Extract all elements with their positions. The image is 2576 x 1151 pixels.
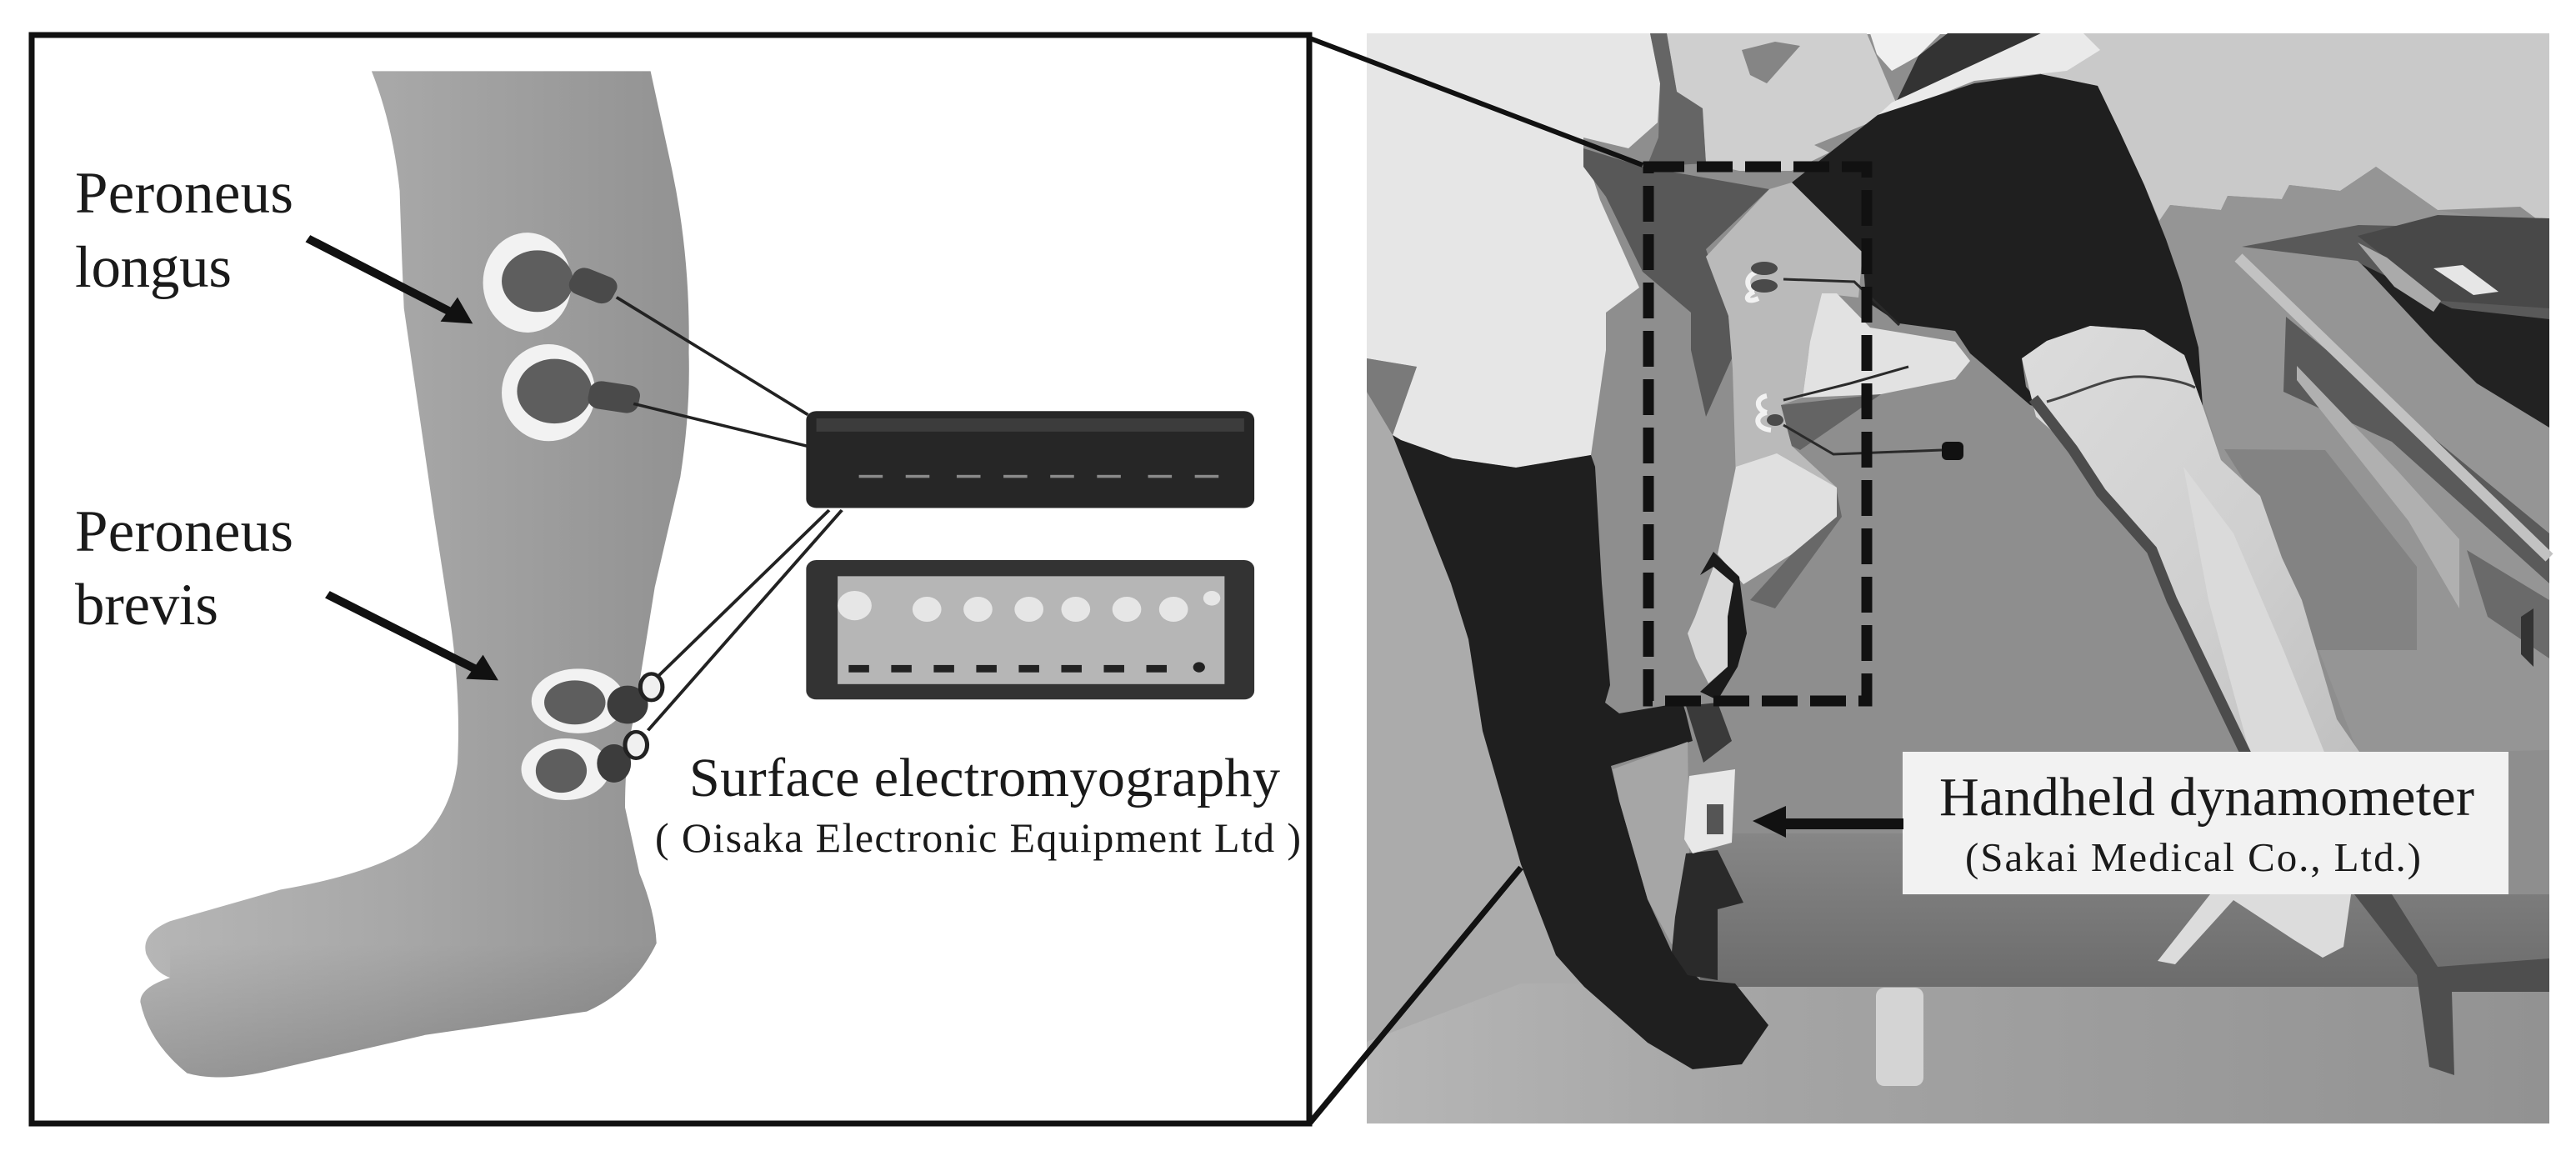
table side band [1700, 833, 2549, 987]
curtain [2041, 33, 2549, 228]
connector line: top [1310, 38, 1643, 165]
electrode marks [1748, 271, 1771, 430]
label: peroneus brevis: brevis [75, 573, 218, 638]
shadow under foot [1781, 394, 1881, 450]
handheld dynamometer [1684, 769, 1735, 853]
left wall below shirt [1367, 358, 1417, 435]
shorts [1792, 74, 2203, 409]
side table [2224, 215, 2549, 667]
EMG device: front view [806, 560, 1254, 699]
strap and subject arm [1647, 33, 2100, 171]
label: peroneus brevis [75, 499, 293, 638]
lower leg highlight [1718, 453, 1837, 584]
photo: measurement setup [1367, 33, 2549, 1123]
lower floor [1367, 983, 2549, 1123]
label: peroneus brevis: Peroneus [75, 499, 293, 564]
arrow: peroneus longus [308, 238, 473, 323]
shadow by ankle [1750, 492, 1842, 608]
label box: handheld dynamometer [1903, 752, 2508, 894]
connector line: bottom [1310, 868, 1521, 1123]
electrode 1 [483, 233, 621, 333]
left floor [1367, 392, 1742, 1123]
label text: handheld dynamometer: Handheld dynamometer [1939, 767, 2474, 828]
subject right leg [2022, 326, 2361, 754]
therapist shirt [1367, 33, 1660, 468]
electrode wires [617, 298, 842, 730]
label: peroneus longus [75, 161, 293, 300]
raised lower leg [1706, 183, 1863, 584]
subject foot [2158, 894, 2351, 964]
label: peroneus longus: Peroneus [75, 161, 293, 226]
panel: electrode placement [32, 35, 1309, 1123]
arrow: to dynamometer [1753, 806, 1903, 838]
strap over foot [1700, 552, 1747, 700]
therapist trousers [1393, 435, 1768, 1069]
electrode 3 [532, 668, 663, 733]
label: surface electromyography: Surface electromyography [689, 748, 1280, 808]
floor behind bed [2159, 167, 2549, 754]
arrow: peroneus brevis [328, 594, 498, 680]
foot in strap [1688, 567, 1733, 683]
electrode 2 [502, 344, 642, 441]
leg highlight [2183, 467, 2325, 754]
label: EMG maker: ( Oisaka Electronic Equipment Ltd ) [655, 814, 1301, 861]
sensors on leg [1751, 262, 1783, 426]
table legs [1876, 894, 2549, 1086]
shorts liner [2047, 377, 2195, 402]
dashed region on photo [1648, 167, 1867, 701]
foot shade [140, 943, 657, 1078]
gap between trousers and strap [1613, 742, 1689, 944]
label: peroneus longus: longus [75, 235, 232, 300]
small sensor box [1942, 442, 1963, 460]
leg [140, 71, 689, 1078]
electrode 4 [522, 732, 648, 800]
EMG device: top view [806, 411, 1254, 508]
therapist arm [1583, 148, 1769, 417]
other foot [1803, 293, 1970, 398]
strap below foot [1686, 703, 1732, 763]
wires [1783, 279, 1942, 454]
leg shadow [2033, 398, 2246, 754]
label text: maker: (Sakai Medical Co., Ltd.) [1965, 834, 2421, 880]
leg illustration [140, 71, 1254, 1078]
strap below dynamometer [1672, 850, 1743, 980]
